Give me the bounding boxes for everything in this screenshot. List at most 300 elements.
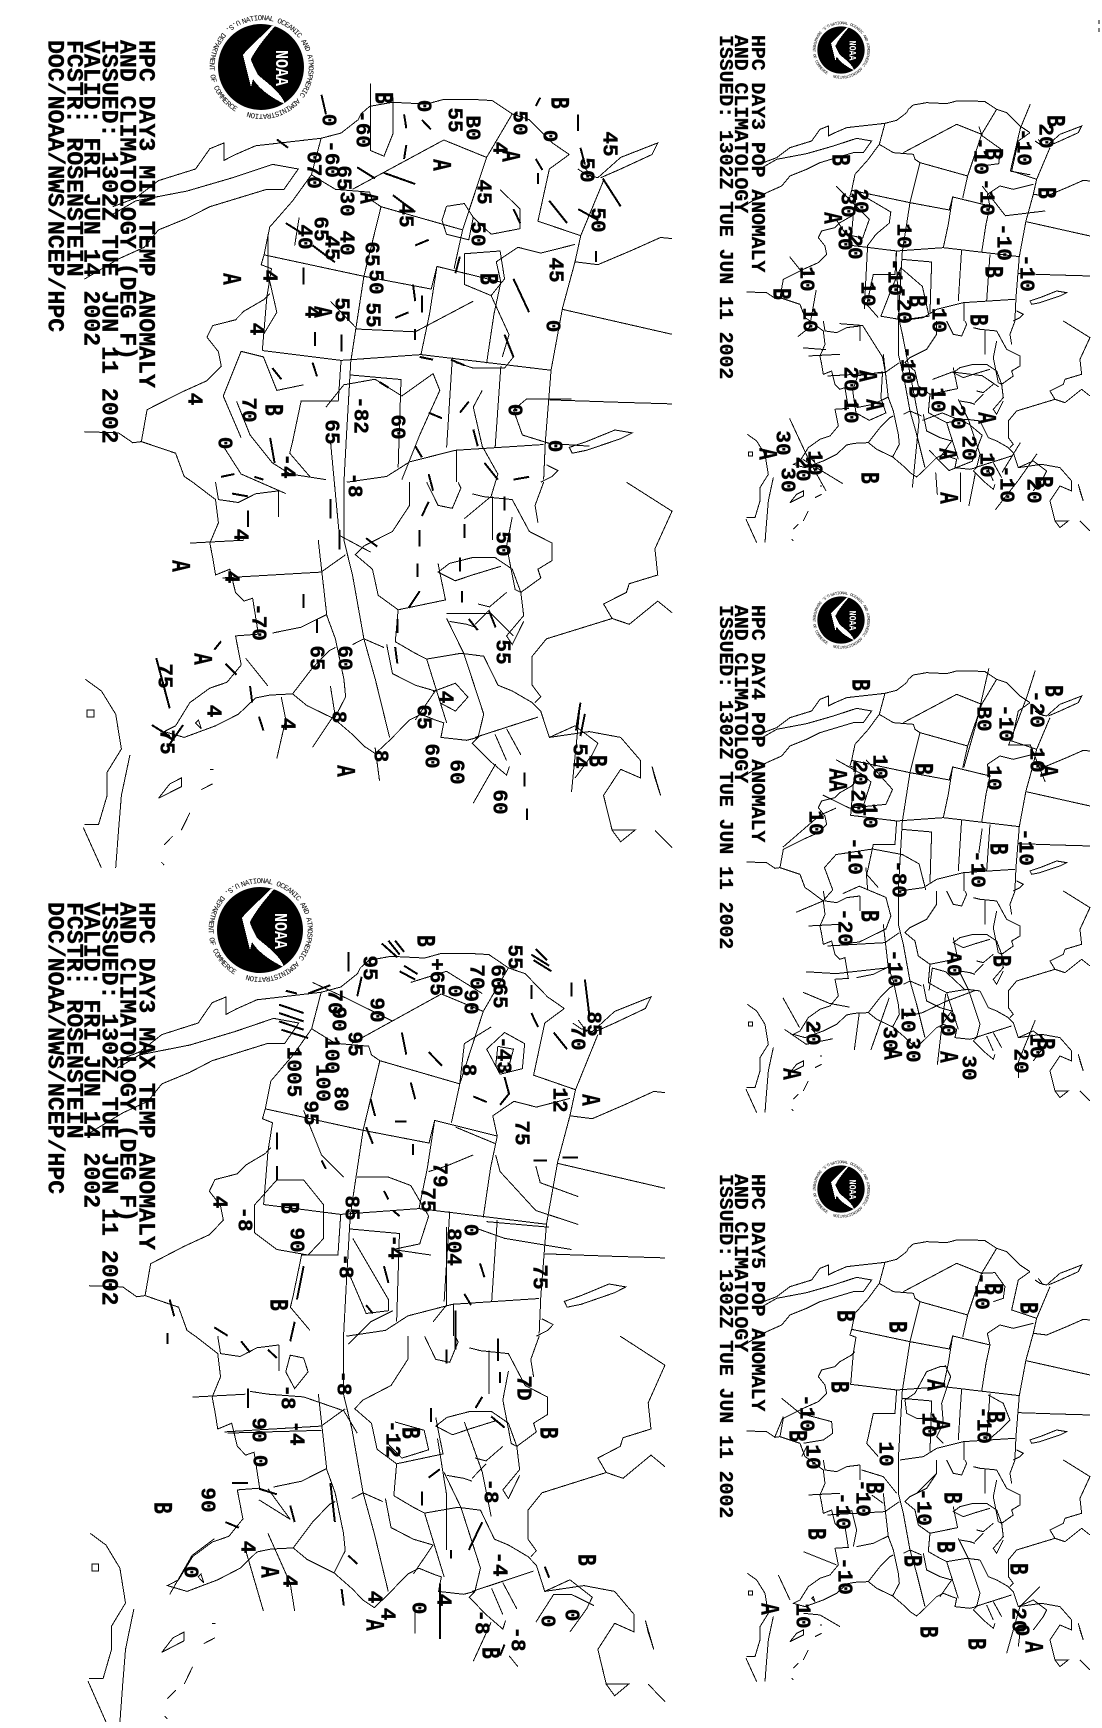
contour labels: 0	[178, 1566, 200, 1578]
icon: NOAA logo	[812, 21, 870, 79]
contour labels: 20	[934, 1011, 958, 1037]
contour labels: 10	[800, 1444, 822, 1470]
contour labels: AA	[821, 768, 851, 792]
panel: Day 3 minimum temperature anomaly	[42, 15, 672, 868]
title: Day 4 PoP: HPC DAY4 POP ANOMALY	[746, 605, 768, 843]
contour labels: 10	[974, 452, 996, 478]
base map	[88, 953, 665, 1722]
contour labels: 0	[534, 1615, 558, 1627]
contour labels: 1005	[280, 1047, 304, 1097]
contour labels: -10	[830, 1492, 852, 1530]
contour labels: 20	[838, 366, 860, 392]
base map	[746, 671, 1090, 1113]
contour labels: 85	[580, 1011, 604, 1037]
contour labels: B	[146, 1502, 176, 1514]
contour labels: 12	[546, 1087, 570, 1113]
contour labels: B	[829, 1310, 859, 1322]
contour labels: -10	[1014, 254, 1036, 292]
contour labels: 50	[464, 221, 488, 247]
contour labels: A	[329, 765, 359, 778]
contour labels: 10	[894, 1007, 918, 1033]
contour labels: 20	[790, 456, 812, 482]
contour labels: B	[977, 1283, 1007, 1295]
contour labels: 50	[506, 110, 530, 136]
contour labels: B	[960, 1638, 990, 1650]
contour labels: B	[781, 1430, 811, 1442]
contour labels: -8	[332, 1253, 356, 1279]
contour labels: 65	[304, 645, 326, 671]
contour labels: +65	[424, 958, 446, 996]
contour labels: B	[1030, 187, 1060, 199]
contour labels: 75	[154, 729, 176, 755]
title: Day 5 PoP	[714, 1174, 768, 1518]
icon: NOAA logo: NATIONAL OCEANIC AND ATMOSPHERIC ADMINISTRATION	[242, 15, 314, 119]
contour labels: 65	[358, 241, 382, 267]
contour labels: -10	[968, 137, 990, 175]
contour labels: 20	[944, 404, 968, 430]
contour labels: B	[823, 1381, 853, 1393]
title: Day 3 PoP: ISSUED: 1302Z TUE JUN 11 2002	[714, 35, 736, 379]
contour labels: B	[901, 295, 931, 307]
contour labels: A	[932, 492, 962, 505]
icon: NOAA logo: U.S. DEPARTMENT OF COMMERCE	[812, 594, 830, 644]
contour labels: -10	[894, 346, 918, 384]
contour labels: 80	[328, 1086, 350, 1112]
contour labels: 20	[800, 1020, 822, 1046]
contour labels: B	[901, 386, 931, 398]
contour labels: 60	[486, 789, 510, 815]
contour labels: 7D	[510, 1375, 534, 1401]
contour labels: 0	[502, 404, 524, 416]
contour labels: -8	[232, 1206, 254, 1232]
contour labels: B	[985, 955, 1015, 967]
contour labels: -4	[382, 1234, 404, 1260]
icon: NOAA logo: NOAA	[846, 1180, 858, 1200]
contour labels: 10	[1024, 747, 1046, 773]
contour labels: A0	[940, 951, 964, 977]
title: Day 3 max temp: DOC/NOAA/NWS/NCEP/HPC	[42, 902, 68, 1194]
contour labels: 90	[246, 1417, 268, 1443]
contour labels: 10	[872, 1441, 896, 1467]
contour labels: 45	[318, 235, 342, 261]
contour labels: A	[1032, 765, 1062, 778]
contour labels: 30	[774, 467, 798, 493]
contour labels: 55	[490, 639, 512, 665]
contour labels: 0	[542, 440, 564, 452]
icon: NOAA logo: U.S. DEPARTMENT OF COMMERCE	[812, 24, 830, 74]
contour labels: 4	[432, 691, 456, 703]
contour labels: 0	[558, 1609, 582, 1621]
contour labels: 10	[854, 281, 878, 307]
isolines	[783, 669, 1045, 1078]
contour labels: 30	[900, 1037, 922, 1063]
contour labels: B	[929, 1541, 959, 1553]
contour labels: -10	[850, 1479, 872, 1517]
contour labels: 54	[566, 743, 590, 769]
contour labels: -60	[318, 140, 342, 178]
contour labels: B	[262, 1299, 292, 1311]
contour labels: A	[1017, 1641, 1047, 1654]
contour labels: A	[164, 560, 194, 573]
contour labels: -10	[992, 704, 1016, 742]
contour labels: 4	[218, 571, 242, 583]
contour labels	[753, 1272, 1047, 1654]
contour labels: B	[858, 1482, 888, 1494]
contour labels: B	[881, 1321, 911, 1333]
contour labels: 8	[368, 750, 390, 762]
contour labels	[146, 935, 604, 1659]
contour labels: -10	[794, 1394, 816, 1432]
contour labels: 55	[502, 944, 524, 970]
title: Day 3 PoP	[714, 35, 768, 379]
contour labels: 79	[426, 1162, 450, 1188]
contour labels: -10	[1010, 128, 1034, 166]
contour labels: 10	[856, 803, 880, 829]
contour labels: -20	[832, 908, 854, 946]
contour labels: 4	[374, 1608, 398, 1620]
contour labels: -43	[490, 1036, 514, 1074]
contour labels: 60	[384, 414, 408, 440]
icon: NOAA logo: NATIONAL OCEANIC AND ATMOSPHERIC ADMINISTRATION	[830, 1160, 870, 1218]
contour labels: 0	[410, 100, 434, 112]
contour labels: B	[570, 1554, 600, 1566]
contour labels: -70	[246, 603, 268, 641]
contour labels: 10	[796, 307, 820, 333]
contour labels: -10	[970, 1406, 994, 1444]
title: Day 3 max temp: FCSTR: ROSENSTEIN	[60, 902, 86, 1139]
contour labels: 90	[364, 997, 386, 1023]
contour labels: B	[581, 755, 611, 767]
contour labels: -4	[284, 1420, 306, 1446]
contour labels: -4	[486, 1551, 510, 1577]
contour labels: -60	[350, 110, 372, 148]
icon: NOAA logo: NATIONAL OCEANIC AND ATMOSPHERIC ADMINISTRATION	[830, 21, 870, 79]
contour labels: B	[962, 314, 992, 326]
contour labels: B	[532, 1427, 562, 1439]
contour labels: 0	[406, 1602, 428, 1614]
contour labels: B	[907, 763, 937, 775]
contour labels: B	[474, 1647, 504, 1659]
contour labels: -12	[380, 1420, 402, 1458]
contour labels: 65	[330, 165, 354, 191]
contour labels: B	[1027, 476, 1057, 488]
contour labels: B	[1037, 685, 1067, 697]
contour labels: A	[494, 150, 524, 163]
contour labels: 4	[274, 718, 298, 730]
contour labels: 804	[440, 1228, 464, 1266]
contour labels: -8	[274, 1384, 298, 1410]
contour labels: -10	[882, 258, 904, 296]
contour labels: A	[352, 192, 382, 205]
contour labels: B	[844, 679, 874, 691]
contour labels: 60	[484, 964, 508, 990]
contour labels: B	[912, 1626, 942, 1638]
contour labels: 4	[256, 270, 280, 282]
contour labels: 10	[790, 1603, 812, 1629]
contour labels: B	[543, 97, 573, 109]
title: Day 3 max temp: ISSUED: 1302Z TUE JUN 11 2002	[96, 902, 122, 1306]
contour labels: A	[924, 1419, 954, 1432]
title: Day 3 min temp: DOC/NOAA/NWS/NCEP/HPC	[42, 40, 68, 332]
contour labels: A	[306, 306, 336, 319]
contour labels: 20	[956, 435, 978, 461]
panel: Day 5 probability of precipitation anomaly	[714, 1160, 1090, 1682]
contour labels: 4	[244, 323, 266, 335]
contour labels: -10	[832, 1557, 854, 1595]
icon: NOAA logo: U.S. DEPARTMENT OF COMMERCE	[210, 20, 241, 112]
contour labels: -10	[910, 1488, 934, 1526]
title: Day 3 PoP: HPC DAY3 POP ANOMALY	[746, 35, 768, 273]
scanner marks at top right corner	[1098, 20, 1100, 32]
contour labels: B	[977, 148, 1007, 160]
contour labels: -10	[990, 223, 1014, 261]
contour labels: B	[800, 1528, 830, 1540]
thick contour dashes	[167, 941, 589, 1656]
contour labels: 30	[956, 1055, 978, 1081]
contour labels: B	[824, 154, 854, 166]
contour labels: 30	[334, 191, 356, 217]
icon: NOAA logo: NOAA	[268, 913, 289, 950]
title: Day 3 min temp: VALID: FRI JUN 14 2002	[78, 40, 104, 346]
contour labels: 8	[456, 1064, 478, 1076]
icon: NOAA logo	[210, 15, 314, 119]
title: Day 3 max temp: AND CLIMATOLOGY (DEG F)	[114, 902, 140, 1222]
contour labels: -20	[890, 286, 914, 324]
contour labels: 90	[326, 1006, 348, 1032]
contour labels: 60	[418, 743, 442, 769]
contour labels: 20	[1008, 1048, 1030, 1074]
title: Day 3 min temp: FCSTR: ROSENSTEIN	[60, 40, 86, 277]
title: Day 3 max temp: VALID: FRI JUN 14 2002	[78, 902, 104, 1208]
contour labels: 45	[470, 179, 494, 205]
contour labels: A	[931, 448, 961, 461]
title: Day 3 max temp: HPC DAY3 MAX TEMP ANOMALY	[132, 902, 158, 1250]
contour labels: 65	[308, 216, 330, 242]
contour labels: 75	[526, 1264, 550, 1290]
contour labels: 0	[536, 130, 560, 142]
contour labels: 4	[298, 306, 322, 318]
contour labels: A	[970, 412, 1000, 425]
contour labels: 30	[832, 225, 854, 251]
contour labels: B0	[460, 115, 482, 141]
contour labels: 45	[392, 202, 416, 228]
contour labels: 10	[794, 266, 816, 292]
contour labels: 10	[980, 765, 1004, 791]
contour labels: 30	[876, 1026, 900, 1052]
base map	[746, 1240, 1090, 1682]
contour labels: 0	[212, 437, 234, 449]
contour labels: 65	[486, 983, 510, 1009]
contour labels: 4	[234, 1541, 258, 1553]
contour labels: 10	[802, 450, 824, 476]
contour labels: B	[853, 472, 883, 484]
icon: NOAA logo: NOAA	[846, 41, 858, 61]
contour labels: 90	[284, 1227, 306, 1253]
contour labels: A	[753, 1603, 783, 1616]
contour labels: -8	[478, 1478, 500, 1504]
contour labels: 55	[328, 297, 352, 323]
icon: NOAA logo	[208, 878, 313, 982]
isolines	[775, 1273, 1040, 1653]
title: Day 3 max temp	[42, 902, 158, 1306]
contour labels: -10	[964, 850, 988, 888]
contour labels: A	[425, 159, 455, 172]
contour labels: 40	[292, 224, 314, 250]
contour labels	[152, 92, 620, 815]
contour labels: 75	[152, 663, 174, 689]
contour labels: 8	[326, 711, 348, 723]
contour labels: 10	[866, 754, 890, 780]
contour labels: A	[851, 370, 881, 383]
contour labels: -10	[842, 837, 864, 875]
title: Day 3 PoP: AND CLIMATOLOGY	[729, 35, 751, 213]
contour labels: B	[853, 910, 883, 922]
contour labels: 100	[318, 1036, 342, 1074]
contour labels: B	[1002, 1563, 1032, 1575]
contour labels: 20	[844, 789, 868, 815]
contour labels: B	[979, 1411, 1009, 1423]
contour labels: 4	[200, 705, 224, 717]
contour labels: B	[982, 843, 1012, 855]
contour labels: 50	[574, 157, 596, 183]
contour labels: 70	[464, 964, 486, 990]
base map	[746, 101, 1090, 543]
contour labels: 20	[842, 234, 864, 260]
contour labels: 75	[414, 1187, 438, 1213]
contour labels: B	[273, 1202, 303, 1214]
contour labels: 070	[300, 151, 324, 189]
panel: Day 3 maximum temperature anomaly	[42, 878, 666, 1722]
contour labels: 0	[458, 1224, 480, 1236]
contour labels: 30	[770, 430, 792, 456]
contour labels: 45	[596, 131, 620, 157]
title: Day 3 min temp: ISSUED: 1302Z TUE JUN 11 2002	[96, 40, 122, 444]
contour labels: A	[358, 1619, 388, 1632]
contour labels: -20	[1024, 690, 1046, 728]
contour labels: 90	[194, 1487, 218, 1513]
contour labels	[751, 115, 1069, 505]
contour labels: 0	[316, 114, 338, 126]
contour labels: A	[932, 1051, 962, 1064]
contour labels: 75	[508, 1120, 532, 1146]
contour labels: -8	[468, 1609, 492, 1635]
contour labels: 20	[1020, 478, 1044, 504]
contour labels: -82	[348, 396, 370, 434]
contour labels: 10	[890, 223, 914, 249]
contour labels: 0	[540, 320, 562, 332]
contour labels: 4	[276, 1575, 300, 1587]
contour labels: 65	[410, 704, 434, 730]
contour labels: 45	[542, 257, 566, 283]
contour labels: A	[186, 653, 216, 666]
contour labels: 90	[458, 989, 480, 1015]
contour labels: B	[896, 1555, 926, 1567]
contour labels: 10	[802, 810, 826, 836]
contour labels: 30	[834, 192, 858, 218]
contour labels: 70	[322, 989, 344, 1015]
contour labels: B	[977, 266, 1007, 278]
contour labels: 4	[206, 1196, 230, 1208]
panel: Day 3 probability of precipitation anomaly	[714, 21, 1090, 543]
contour labels: 95	[356, 955, 380, 981]
isolines	[223, 84, 589, 803]
contour labels: 55	[442, 107, 464, 133]
panel: Day 4 probability of precipitation anomaly	[714, 591, 1090, 1113]
contour labels: B0	[970, 706, 994, 732]
contour labels: A	[215, 273, 245, 286]
contour labels: -10	[926, 295, 948, 333]
contour labels: 20	[1006, 1607, 1028, 1633]
contour labels: -10	[968, 1272, 992, 1310]
contour labels: -8	[504, 1626, 528, 1652]
contour labels: 85	[338, 1195, 362, 1221]
contour labels: 95	[342, 1031, 364, 1057]
contour labels: 10	[924, 387, 948, 413]
contour labels: 4	[486, 142, 510, 154]
contour labels: 70	[236, 397, 258, 423]
contour labels: B	[409, 935, 439, 947]
contour labels	[775, 679, 1067, 1081]
contour labels: B	[367, 92, 397, 104]
contour labels: B	[765, 288, 795, 300]
contour labels: -10	[974, 178, 996, 216]
title: Day 3 min temp: HPC DAY3 MIN TEMP ANOMALY	[132, 40, 158, 388]
title: Day 5 PoP: ISSUED: 1302Z TUE JUN 11 2002	[714, 1174, 736, 1518]
title: Day 4 PoP: AND CLIMATOLOGY	[729, 605, 751, 783]
contour labels: 4	[228, 529, 250, 541]
icon: NOAA logo: NOAA	[269, 50, 290, 87]
contour labels: A	[574, 1094, 604, 1107]
contour labels: B	[936, 1492, 966, 1504]
contour labels: 50	[584, 207, 608, 233]
contour labels: B	[394, 1427, 424, 1439]
isolines	[170, 971, 594, 1667]
isolines	[790, 104, 1045, 510]
contour labels: 65	[318, 419, 342, 445]
contour labels: -80	[886, 860, 908, 898]
contour labels: B	[472, 273, 502, 285]
title: Day 3 min temp: AND CLIMATOLOGY (DEG F)	[114, 40, 140, 360]
contour labels: B	[1012, 1302, 1042, 1314]
contour labels: A	[876, 1048, 906, 1061]
title: Day 5 PoP: HPC DAY5 POP ANOMALY	[746, 1174, 768, 1412]
contour labels: 10	[1024, 1033, 1046, 1059]
contour labels: 60	[332, 645, 354, 671]
title: Day 4 PoP	[714, 605, 768, 949]
contour labels: -8	[330, 1370, 354, 1396]
contour labels: 55	[360, 302, 382, 328]
contour labels: -4	[274, 453, 298, 479]
contour labels: 0	[442, 985, 464, 997]
base map	[83, 99, 672, 868]
contour labels: 4	[430, 1594, 454, 1606]
contour labels: 0	[1008, 1624, 1032, 1636]
contour labels: 20	[848, 188, 870, 214]
title: Day 4 PoP: ISSUED: 1302Z TUE JUN 11 2002	[714, 605, 736, 949]
contour labels: B	[1039, 115, 1069, 127]
contour labels: 0	[246, 1455, 270, 1467]
contour labels: A	[816, 212, 846, 225]
icon: NOAA logo: NATIONAL OCEANIC AND ATMOSPHERIC ADMINISTRATION	[830, 591, 870, 649]
title: Day 3 min temp	[42, 40, 158, 444]
contour labels: A	[775, 1068, 805, 1081]
icon: NOAA logo	[812, 1160, 870, 1218]
icon: NOAA logo: U.S. DEPARTMENT OF COMMERCE	[812, 1164, 830, 1214]
contour labels: -10	[994, 465, 1016, 503]
contour labels: B	[257, 404, 287, 416]
icon: NOAA logo: NOAA	[846, 611, 858, 631]
contour labels: 10	[916, 1412, 938, 1438]
